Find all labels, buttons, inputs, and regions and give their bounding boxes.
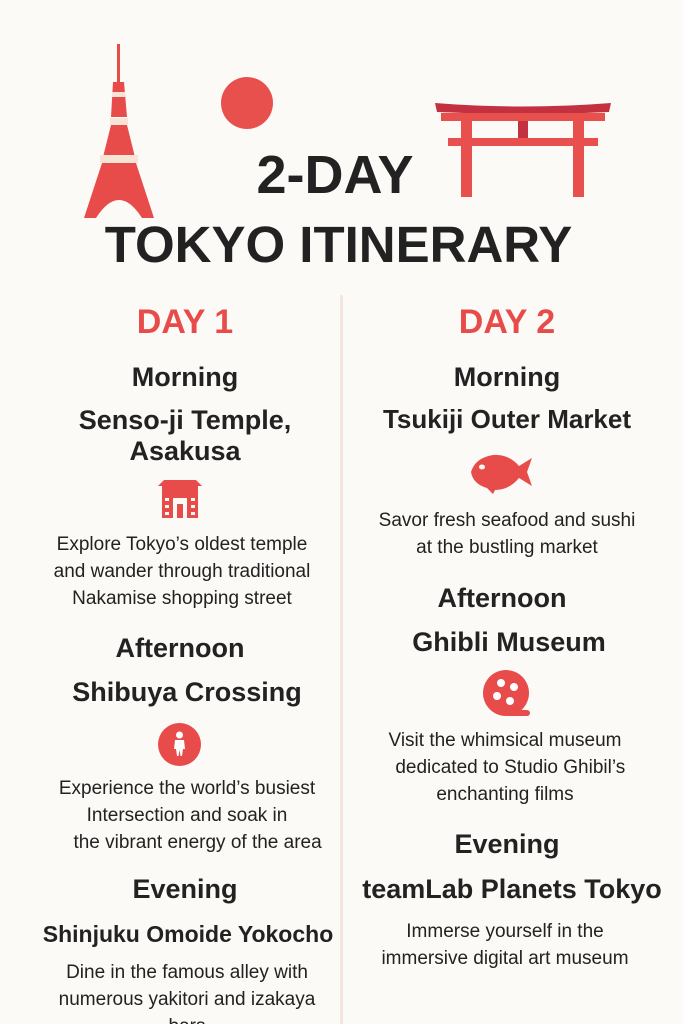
text: teamlab: Immerse yourself in the [406,921,604,942]
text: shinjuku: numerous yakitori and izakaya [59,989,315,1010]
text: teamlab [381,921,629,969]
title: TOKYO ITINERARY [105,216,572,273]
icon: fish [471,454,532,494]
text: tsukiji: at the bustling market [416,537,598,558]
text: shibuya: Experience the world’s busiest [59,778,315,799]
evening: Evening [454,829,560,859]
heading: day 2: DAY 2 [459,303,555,341]
text: sensoji: Nakamise shopping street [72,588,292,609]
text: shinjuku: Dine in the famous alley with [66,962,308,983]
panel: day 2 [362,303,662,969]
text: sensoji: and wander through traditional [54,561,310,582]
icon: tokyo tower [84,44,154,218]
place: tsukiji: Tsukiji Outer Market [383,404,631,434]
text: shibuya [59,778,322,853]
place: shinjuku: Shinjuku Omoide Yokocho [43,921,333,947]
text: shibuya: the vibrant energy of the area [73,832,322,853]
icon: temple [158,480,202,518]
afternoon: Afternoon [116,633,244,663]
text: tsukiji: Savor fresh seafood and sushi [379,510,635,531]
text: teamlab: immersive digital art museum [381,948,629,969]
text: sensoji: Explore Tokyo’s oldest temple [57,534,307,555]
title: 2-DAY [256,145,414,205]
text: ghibli: Visit the whimsical museum [388,730,622,751]
afternoon: Afternoon [438,583,566,613]
place: ghibli: Ghibli Museum [412,627,606,657]
icon: torii gate [435,103,611,197]
text: ghibli [388,730,625,805]
place: shibuya: Shibuya Crossing [72,677,302,707]
icon: sun [221,77,273,129]
text: tsukiji [379,510,635,558]
panel: day 1 [43,303,333,1024]
title [105,145,572,273]
morning: Morning [454,362,560,392]
text: ghibli: dedicated to Studio Ghibil’s [395,757,625,778]
place: sensoji: Senso-ji Temple, [79,405,291,435]
heading: day 1: DAY 1 [137,303,233,341]
place: sensoji: Asakusa [129,436,241,466]
text: ghibli: enchanting films [436,784,574,805]
text: sensoji [54,534,310,609]
text: shibuya: Intersection and soak in [87,805,287,826]
place: teamlab: teamLab Planets Tokyo [362,874,662,904]
divider [340,295,343,1024]
morning: Morning [132,362,238,392]
icon: pedestrian [158,723,201,766]
place: sensoji [79,405,291,466]
text: shinjuku [59,962,316,1024]
evening: Evening [132,874,238,904]
icon: film reel [483,670,530,716]
